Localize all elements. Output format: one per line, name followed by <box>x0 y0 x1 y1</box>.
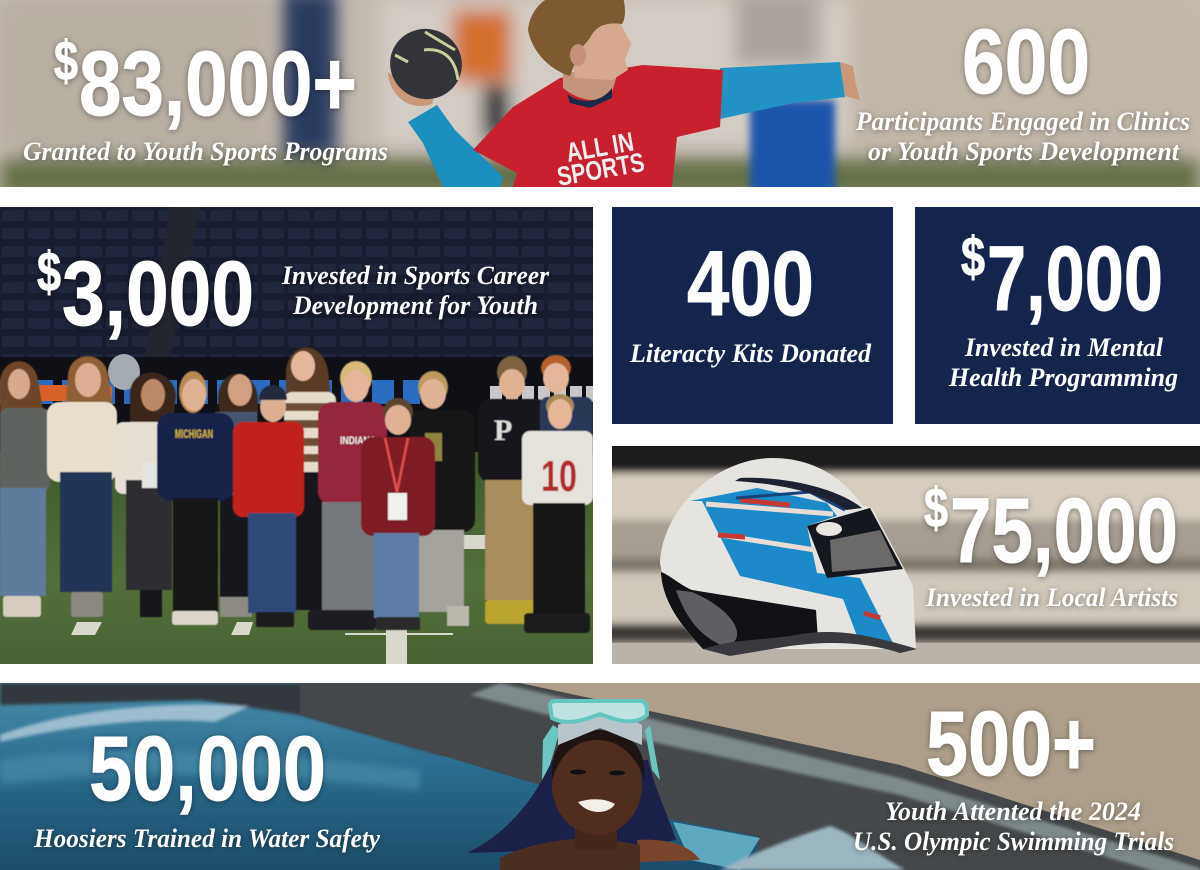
caption: literacy kits donated: Literacty Kits Donated <box>629 339 872 368</box>
caption: youth attended olympic trials <box>853 797 1174 856</box>
photo: blurred track background <box>600 436 1200 664</box>
photo: stadium and field <box>0 207 593 664</box>
stat: $83,000+: $ <box>54 29 78 92</box>
photo: group of kids: MICHIGAN <box>175 427 213 441</box>
stat: $75,000: $ <box>924 476 948 539</box>
stat: 500+: 500+ <box>926 693 1096 795</box>
photo: group of kids: INDIANA <box>340 435 376 447</box>
photo: group of kids <box>0 348 593 633</box>
caption: participants engaged: or Youth Sports Development <box>868 137 1180 166</box>
stat: $7,000: $ <box>961 225 985 288</box>
icon: painted racing helmet <box>660 458 917 656</box>
panel: swimming photo <box>0 683 1200 870</box>
caption: granted to youth sports programs: Granted to Youth Sports Programs <box>23 137 388 166</box>
caption: participants engaged <box>855 107 1190 166</box>
stat: $3,000 <box>37 249 252 342</box>
stat: $3,000: $ <box>37 240 61 303</box>
photo: boy throwing football: SPORTS <box>555 147 647 192</box>
caption: sports career development <box>281 261 550 320</box>
photo: blurred gym background <box>0 0 1200 198</box>
stat: $83,000+: 83,000+ <box>79 33 357 135</box>
caption: invested in local artists: Invested in Local Artists <box>925 583 1178 612</box>
photo: smiling child with goggles <box>467 701 700 870</box>
photo: pool and deck <box>0 683 1200 870</box>
stat: 600: 600 <box>962 11 1090 113</box>
panel: literacy kits <box>612 207 893 424</box>
caption: hoosiers trained: Hoosiers Trained in Water Safety <box>33 824 380 853</box>
caption: youth attended olympic trials: Youth Attented the 2024 <box>885 797 1141 826</box>
caption: mental health programming: Health Programming <box>948 363 1178 392</box>
panel: group photo with career development stat <box>0 207 593 664</box>
caption: sports career development: Development for Youth <box>292 291 538 320</box>
photo: group of kids: 10 <box>541 452 577 501</box>
photo: boy throwing football: ALL IN <box>564 127 636 168</box>
stat: $3,000: 3,000 <box>62 243 254 345</box>
caption: youth attended olympic trials: U.S. Olympic Swimming Trials <box>853 827 1174 856</box>
caption: participants engaged: Participants Engaged in Clinics <box>855 107 1190 136</box>
stat: 50,000: 50,000 <box>89 718 326 820</box>
caption: mental health programming <box>948 333 1178 392</box>
photo: group of kids: P <box>494 414 512 447</box>
panel: mental health <box>915 207 1200 424</box>
photo: boy throwing football <box>380 0 860 192</box>
stat: 400: 400 <box>687 233 814 335</box>
caption: mental health programming: Invested in Mental <box>964 333 1164 362</box>
panel: top photo with thrower <box>0 0 1200 198</box>
caption: sports career development: Invested in Sports Career <box>281 261 550 290</box>
panel: helmet and local artists <box>600 436 1200 664</box>
